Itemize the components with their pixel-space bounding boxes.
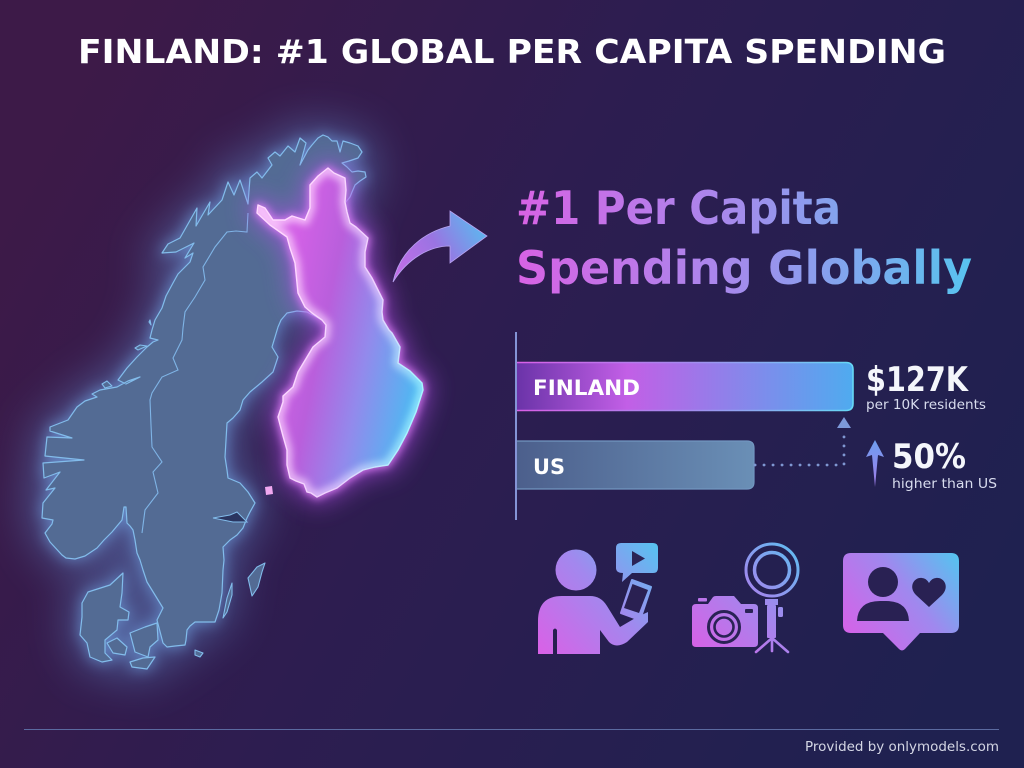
footer credit: Provided by onlymodels.com: [805, 740, 999, 755]
value: Finland: per 10K residents: [866, 397, 986, 413]
bar chart: [516, 332, 853, 520]
Finland edge: [257, 168, 423, 497]
Finland bar: [516, 362, 853, 410]
arrow: map to headline: [393, 211, 487, 282]
headline: #1 Per Capita: [516, 181, 841, 235]
icon: up arrow: [866, 440, 884, 487]
map wide glow: [42, 135, 366, 669]
icon: person with phone: [538, 543, 658, 654]
Lake Malaren: [213, 512, 247, 522]
US bar: US: [533, 455, 565, 479]
Finland: [257, 168, 423, 497]
map near glow: [42, 135, 366, 669]
headline: Spending Globally: [516, 241, 972, 295]
value: percent difference: 50%: [892, 437, 966, 477]
Baltic islands: [102, 320, 265, 657]
Norway-Sweden border: [142, 213, 248, 533]
value: Finland: $127K: [866, 360, 969, 400]
axis: [515, 332, 517, 520]
value: percent difference: higher than US: [892, 476, 997, 492]
Denmark: [80, 573, 158, 669]
US bar: [516, 441, 754, 489]
value: percent difference: [892, 437, 997, 492]
title: FINLAND: #1 GLOBAL PER CAPITA SPENDING: [78, 32, 946, 71]
footer rule: [24, 728, 999, 730]
icon: camera and ring light: [692, 544, 798, 652]
Finland inner glow: [257, 168, 423, 497]
Finland near glow: [257, 168, 423, 497]
Finland wide glow: [257, 168, 423, 497]
headline: [516, 181, 972, 295]
Finland bar: FINLAND: [533, 376, 640, 400]
map: Nordic countries: [42, 135, 423, 669]
Aland islands: [265, 486, 273, 495]
Norway and Sweden landmass: [42, 135, 366, 647]
icon: profile with heart speech bubble: [843, 553, 959, 650]
dotted connector: [755, 417, 851, 465]
